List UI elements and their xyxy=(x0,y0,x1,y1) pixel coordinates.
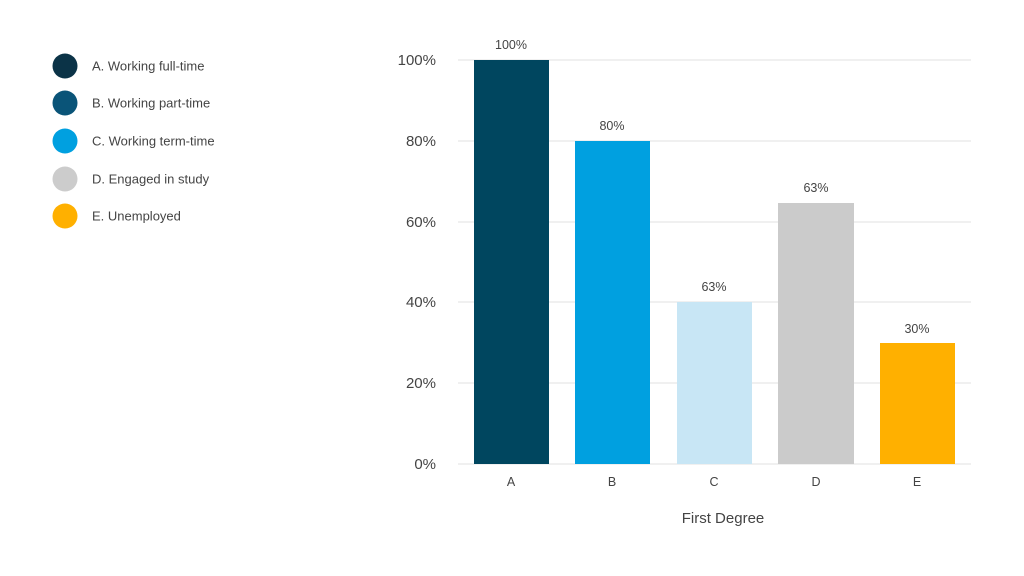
y axis labels xyxy=(398,52,436,473)
x axis labels: C xyxy=(709,475,719,489)
legend item D xyxy=(52,166,210,192)
legend item E: E. Unemployed xyxy=(92,208,181,224)
bars xyxy=(474,60,955,464)
value labels: 30% xyxy=(904,322,930,336)
y axis labels: 0% xyxy=(414,456,436,473)
x axis labels xyxy=(507,475,921,489)
legend xyxy=(52,54,215,228)
x axis labels: A xyxy=(507,475,516,489)
value labels: 80% xyxy=(599,119,625,133)
legend item A: A. Working full-time xyxy=(92,58,204,74)
value labels xyxy=(495,38,930,336)
legend item A xyxy=(52,54,204,78)
value labels: 63% xyxy=(803,181,829,195)
value labels: 63% xyxy=(701,280,727,294)
legend item C: C. Working term-time xyxy=(92,134,215,148)
y axis labels: 20% xyxy=(406,375,436,392)
x axis labels: D xyxy=(811,475,821,489)
legend item B xyxy=(52,90,210,116)
y axis labels: 60% xyxy=(406,214,436,231)
y axis labels: 40% xyxy=(406,294,436,311)
legend item B: B. Working part-time xyxy=(92,96,210,110)
legend item D: D. Engaged in study xyxy=(92,172,210,186)
y axis labels: 100% xyxy=(398,52,436,69)
axis title: First Degree xyxy=(682,510,764,527)
value labels: 100% xyxy=(495,38,527,52)
legend item C xyxy=(52,128,215,154)
x axis labels: E xyxy=(913,475,921,489)
y axis labels: 80% xyxy=(406,133,436,150)
bar chart xyxy=(398,38,971,527)
legend item E xyxy=(52,204,181,228)
x axis labels: B xyxy=(608,475,616,489)
